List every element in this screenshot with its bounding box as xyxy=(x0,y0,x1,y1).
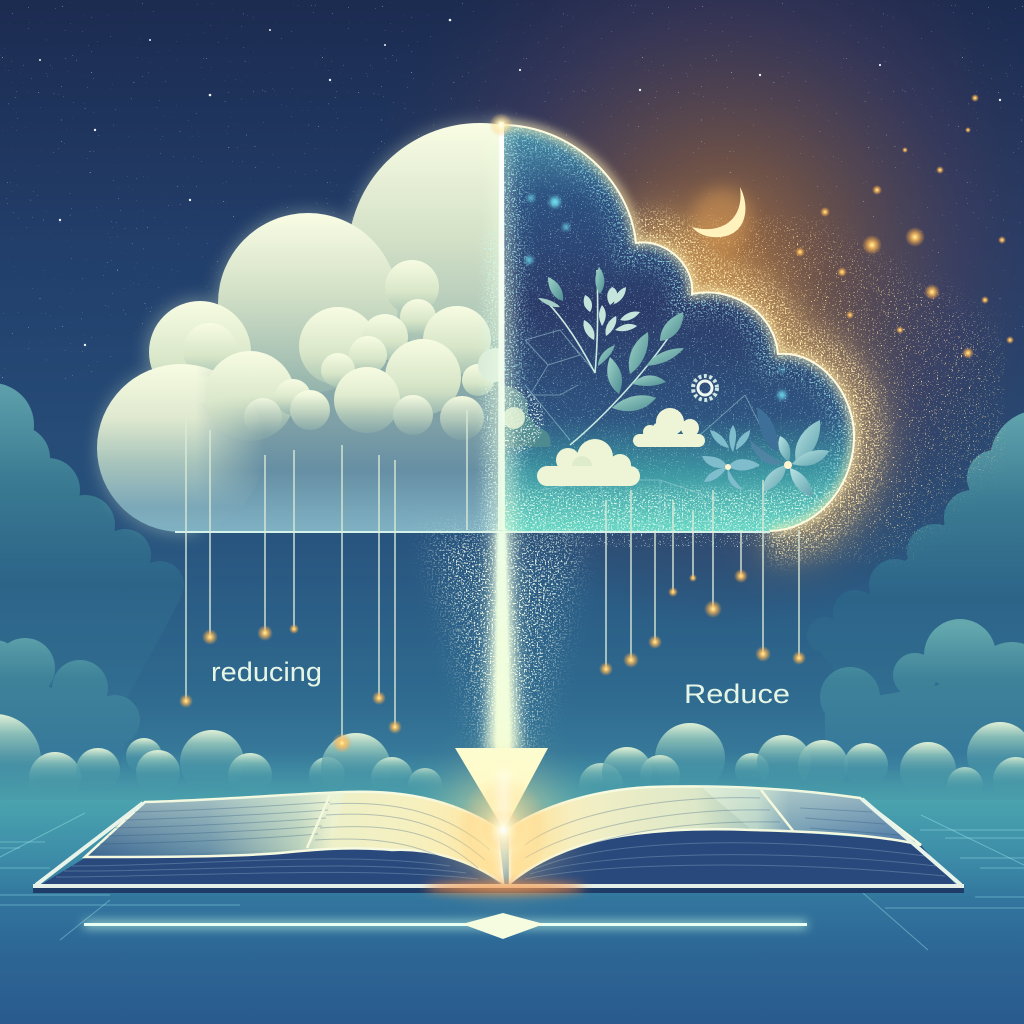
right page sheen xyxy=(700,786,921,845)
warm haze around right cloud xyxy=(636,242,854,531)
small clouds xyxy=(537,408,705,486)
botanical branch xyxy=(538,267,684,445)
left page sheen xyxy=(85,792,345,857)
book spine orange glow xyxy=(425,882,585,894)
big background puffs xyxy=(97,123,499,532)
downward arrow xyxy=(455,748,548,830)
network lines xyxy=(525,330,760,530)
rain threads left with lights xyxy=(179,410,467,753)
open book xyxy=(33,786,964,894)
glitter around right cloud xyxy=(636,215,1005,565)
horizon haze xyxy=(0,750,1024,800)
page fold lines xyxy=(307,790,794,848)
book cover outline xyxy=(36,799,961,885)
cloud glow: left outline xyxy=(97,121,614,534)
bottom rim xyxy=(175,531,770,533)
dim sparkle puffs xyxy=(504,386,550,454)
label: Reduce: Reduce xyxy=(684,679,790,709)
side cloud: right back xyxy=(807,410,1024,730)
right page block xyxy=(510,829,955,884)
glitter falling to book xyxy=(432,533,815,750)
moon xyxy=(692,187,752,248)
page block stripes xyxy=(56,843,945,879)
horizon clouds: right xyxy=(579,722,1024,807)
foreground puffs fading into base xyxy=(205,299,512,441)
left half of cloud xyxy=(97,123,499,532)
gear icon xyxy=(693,376,717,400)
rain threads right with lights xyxy=(599,480,806,676)
side cloud: right middle xyxy=(820,619,1024,770)
inner rim texture xyxy=(502,125,854,531)
glitter strip beside beam xyxy=(484,230,500,535)
flowers xyxy=(702,407,829,497)
main cloud xyxy=(97,120,868,535)
left page block xyxy=(42,848,500,884)
teal lower sparkle xyxy=(498,490,868,535)
side cloud: left back xyxy=(0,383,184,730)
blue glints xyxy=(526,195,786,399)
side cloud: left middle xyxy=(0,638,140,770)
page text lines xyxy=(100,798,900,872)
label: reducing: reducing xyxy=(211,657,322,687)
left page xyxy=(85,792,503,883)
orange floating lights xyxy=(795,94,1014,359)
right half of cloud xyxy=(502,126,853,531)
book center warm glow xyxy=(448,770,558,880)
bottom light bar with diamond xyxy=(84,913,807,939)
right page xyxy=(510,786,921,883)
floor with grid xyxy=(0,797,1024,1024)
stars xyxy=(0,0,1024,380)
book base shadow xyxy=(33,888,964,893)
right bright rim xyxy=(502,125,854,531)
central light beam xyxy=(486,113,520,770)
book center flare xyxy=(457,770,549,888)
horizon clouds: left xyxy=(0,714,442,806)
book base strip xyxy=(33,884,964,888)
